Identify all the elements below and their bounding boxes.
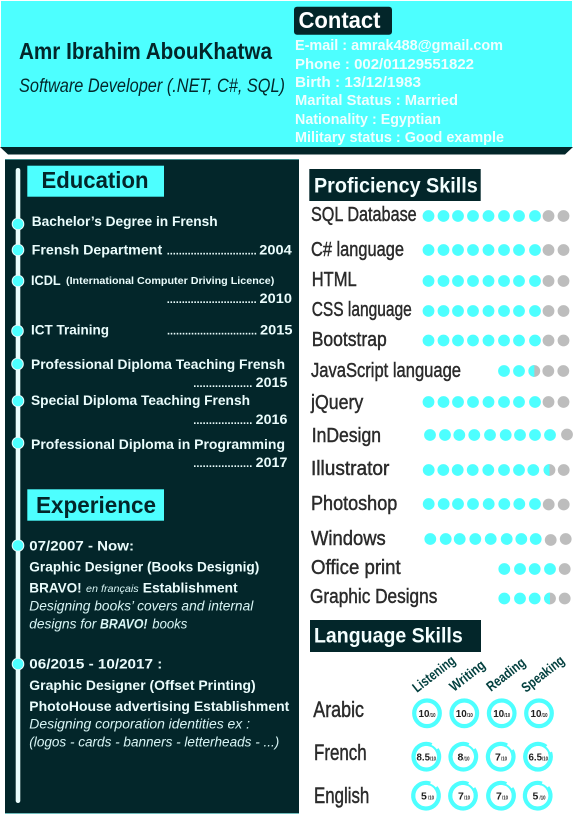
education list: Professional Diploma Teaching Frensh bbox=[31, 356, 285, 372]
contact heading: Contact bbox=[298, 7, 381, 33]
experience entry 2: PhotoHouse advertising Establishment bbox=[29, 698, 290, 714]
language: Arabic: /10 bbox=[542, 713, 548, 719]
language: French: /10 bbox=[542, 756, 548, 762]
skill: Photoshop bbox=[311, 493, 570, 515]
contact details: Marital Status : Married bbox=[295, 92, 458, 109]
experience entry 1: Designing books’ covers and internal bbox=[29, 599, 254, 614]
language: English: /10 bbox=[502, 795, 508, 801]
experience entry 1: en français bbox=[86, 584, 139, 595]
contact details bbox=[295, 37, 504, 146]
language: Arabic: /10 bbox=[467, 713, 473, 719]
experience entry 2: Graphic Designer (Offset Printing) bbox=[29, 677, 256, 693]
skill: jQuery bbox=[310, 392, 569, 414]
language: Arabic: /10 bbox=[430, 713, 436, 719]
language: English: English bbox=[314, 783, 369, 808]
education list: Bachelor’s Degree in Frensh bbox=[32, 213, 218, 229]
language: English bbox=[314, 778, 556, 814]
skill: JavaScript language: JavaScript language bbox=[311, 360, 461, 382]
education list: 2015 bbox=[260, 321, 293, 337]
experience entry 2: Designing corporation identities ex : bbox=[29, 717, 250, 732]
experience entry 1: Establishment bbox=[143, 580, 238, 596]
skill: Illustrator: Illustrator bbox=[311, 458, 390, 480]
skill: Office print bbox=[311, 557, 571, 579]
column labels: Listening bbox=[409, 652, 458, 695]
column labels: Writing bbox=[446, 657, 488, 694]
education list: .............................. bbox=[167, 294, 257, 306]
language: French: /10 bbox=[501, 756, 507, 762]
skill: Bootstrap bbox=[312, 329, 569, 351]
skill: Bootstrap: Bootstrap bbox=[312, 329, 387, 351]
education list: ................... bbox=[193, 378, 252, 390]
language: English: 5 bbox=[532, 790, 538, 802]
contact details: E-mail : amrak488@gmail.com bbox=[295, 37, 503, 54]
language: Arabic: Arabic bbox=[313, 697, 364, 722]
language: French: /10 bbox=[464, 756, 470, 762]
education list: ................... bbox=[193, 415, 252, 427]
language: French: 8.5 bbox=[416, 751, 430, 763]
proficiency skills heading bbox=[309, 169, 481, 201]
skill: Photoshop: Photoshop bbox=[311, 493, 397, 515]
education list: 2016 bbox=[256, 411, 288, 427]
skill: CSS language: CSS language bbox=[312, 299, 412, 321]
experience entry 2: 06/2015 - 10/2017 : bbox=[29, 656, 162, 672]
skill: Windows bbox=[311, 528, 572, 550]
job title: Software Developer (.NET, C#, SQL) bbox=[19, 76, 285, 97]
header band bbox=[0, 1, 573, 154]
name: Amr Ibrahim AbouKhatwa bbox=[19, 38, 272, 64]
language: French: French bbox=[314, 740, 367, 765]
column labels bbox=[409, 652, 567, 695]
language: Arabic bbox=[313, 697, 552, 726]
experience entry 1: BRAVO! bbox=[29, 580, 82, 596]
education list: 2017 bbox=[256, 454, 288, 470]
education list: 2004 bbox=[259, 241, 292, 257]
experience entry 2: (logos - cards - banners - letterheads - ...) bbox=[29, 735, 279, 750]
skill: jQuery: jQuery bbox=[310, 392, 363, 414]
contact details: Nationality : Egyptian bbox=[295, 111, 441, 128]
education list: Frensh Department bbox=[32, 241, 163, 257]
language: English: /10 bbox=[540, 796, 546, 802]
skill: CSS language bbox=[312, 299, 569, 321]
experience entry 1: 07/2007 - Now: bbox=[29, 538, 134, 554]
language: English: 7 bbox=[496, 790, 502, 802]
skill: SQL Database: SQL Database bbox=[311, 204, 417, 226]
language: English: 7 bbox=[458, 790, 464, 802]
education list: (International Computer Driving Licence) bbox=[66, 275, 274, 287]
language: English: 5 bbox=[421, 790, 427, 802]
experience heading: Experience bbox=[36, 492, 156, 518]
skill: HTML: HTML bbox=[312, 269, 357, 291]
experience entry 1 bbox=[29, 538, 259, 632]
language: French: /10 bbox=[430, 756, 436, 762]
experience entry 2 bbox=[29, 656, 290, 750]
experience entry 1: books bbox=[152, 617, 188, 632]
skill: HTML bbox=[312, 269, 569, 291]
column labels: Reading bbox=[483, 654, 528, 694]
language skills heading: Language Skills bbox=[314, 624, 463, 648]
language: French: 8 bbox=[458, 752, 464, 764]
language: Arabic: /10 bbox=[504, 713, 510, 719]
contact details: Phone : 002/01129551822 bbox=[295, 56, 474, 73]
language: Arabic: 10 bbox=[456, 708, 467, 720]
language: French bbox=[314, 739, 554, 775]
language skills heading bbox=[310, 620, 481, 652]
skill: C# language bbox=[311, 239, 569, 261]
education list: .............................. bbox=[167, 325, 257, 337]
contact details: Birth : 13/12/1983 bbox=[295, 74, 421, 91]
language: English: /10 bbox=[464, 795, 470, 801]
skill: InDesign: InDesign bbox=[312, 425, 381, 447]
education list bbox=[31, 213, 293, 470]
skill: InDesign bbox=[312, 425, 573, 447]
education list: 2010 bbox=[260, 290, 292, 306]
skill: Illustrator bbox=[311, 458, 570, 480]
education list: 2015 bbox=[256, 374, 288, 390]
education list: .............................. bbox=[167, 245, 257, 257]
skill: Graphic Designs: Graphic Designs bbox=[310, 586, 437, 608]
education heading: Education bbox=[42, 167, 148, 193]
language: French: 7 bbox=[495, 752, 501, 764]
language: Arabic: 10 bbox=[418, 708, 430, 720]
left dark panel bbox=[5, 159, 299, 814]
education heading bbox=[27, 166, 164, 197]
education list: ................... bbox=[193, 458, 252, 470]
skill: SQL Database bbox=[311, 204, 569, 226]
language: French: 6.5 bbox=[528, 751, 542, 763]
experience entry 1: Graphic Designer (Books Designig) bbox=[29, 559, 259, 575]
skill: Graphic Designs bbox=[310, 586, 571, 608]
skill: C# language: C# language bbox=[311, 239, 404, 261]
timeline bbox=[12, 168, 24, 803]
language: English: /10 bbox=[428, 796, 434, 802]
education list: ICDL bbox=[31, 272, 61, 288]
proficiency skills heading: Proficiency Skills bbox=[314, 174, 478, 198]
education list: ICT Training bbox=[31, 321, 109, 337]
skill: Office print: Office print bbox=[311, 557, 401, 579]
language: Arabic: 10 bbox=[493, 708, 504, 720]
contact details: Military status : Good example bbox=[295, 129, 504, 146]
skill: Windows: Windows bbox=[311, 528, 386, 550]
education list: Special Diploma Teaching Frensh bbox=[31, 392, 250, 408]
experience entry 1: BRAVO! bbox=[100, 617, 148, 632]
education list: Professional Diploma in Programming bbox=[31, 436, 285, 452]
language: Arabic: 10 bbox=[530, 708, 542, 720]
experience entry 1: designs for bbox=[29, 617, 97, 632]
